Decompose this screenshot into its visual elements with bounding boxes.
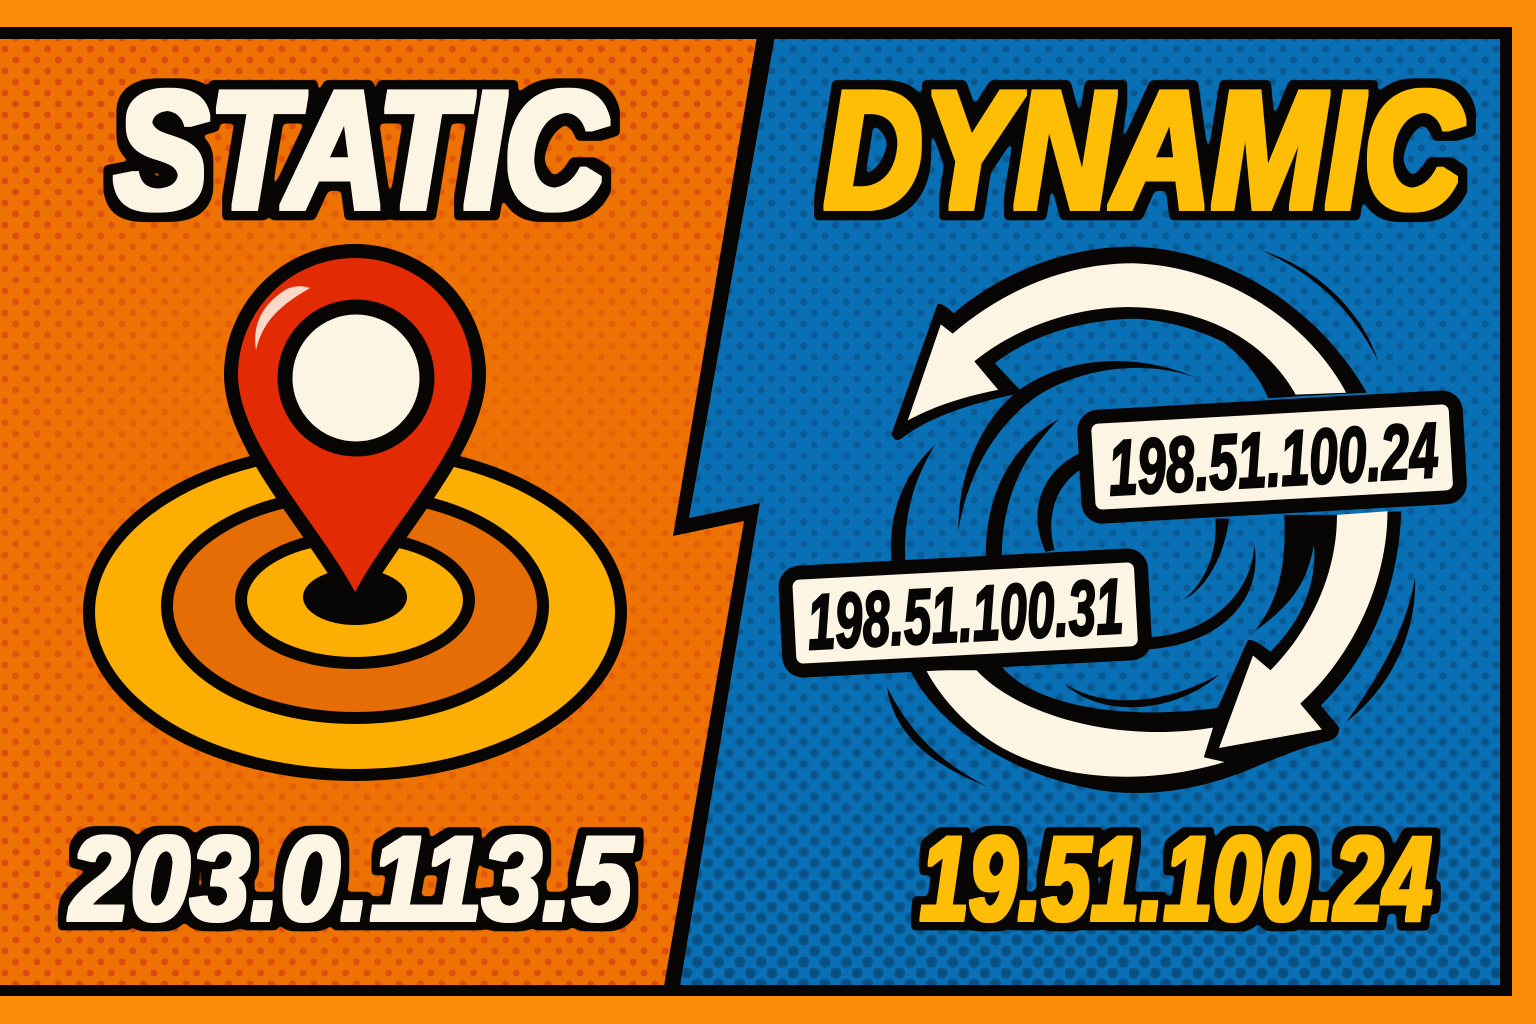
label: 198.51.100.31: 198.51.100.31 — [805, 562, 1125, 666]
icon: target rings — [89, 449, 621, 775]
label: 198.51.100.31 — [785, 555, 1145, 671]
panel: static — [0, 36, 780, 986]
static ip address: 203.0.113.5 — [68, 812, 634, 946]
top arrow — [892, 247, 1367, 440]
bottom arrow — [910, 511, 1401, 793]
icon: rotating arrows and swirl — [887, 247, 1415, 793]
icon: location pin — [231, 251, 479, 608]
black zigzag divider — [664, 36, 775, 986]
swirl lines — [887, 250, 1415, 787]
heading: static: STATIC — [114, 56, 608, 244]
panel: dynamic — [680, 36, 1502, 986]
